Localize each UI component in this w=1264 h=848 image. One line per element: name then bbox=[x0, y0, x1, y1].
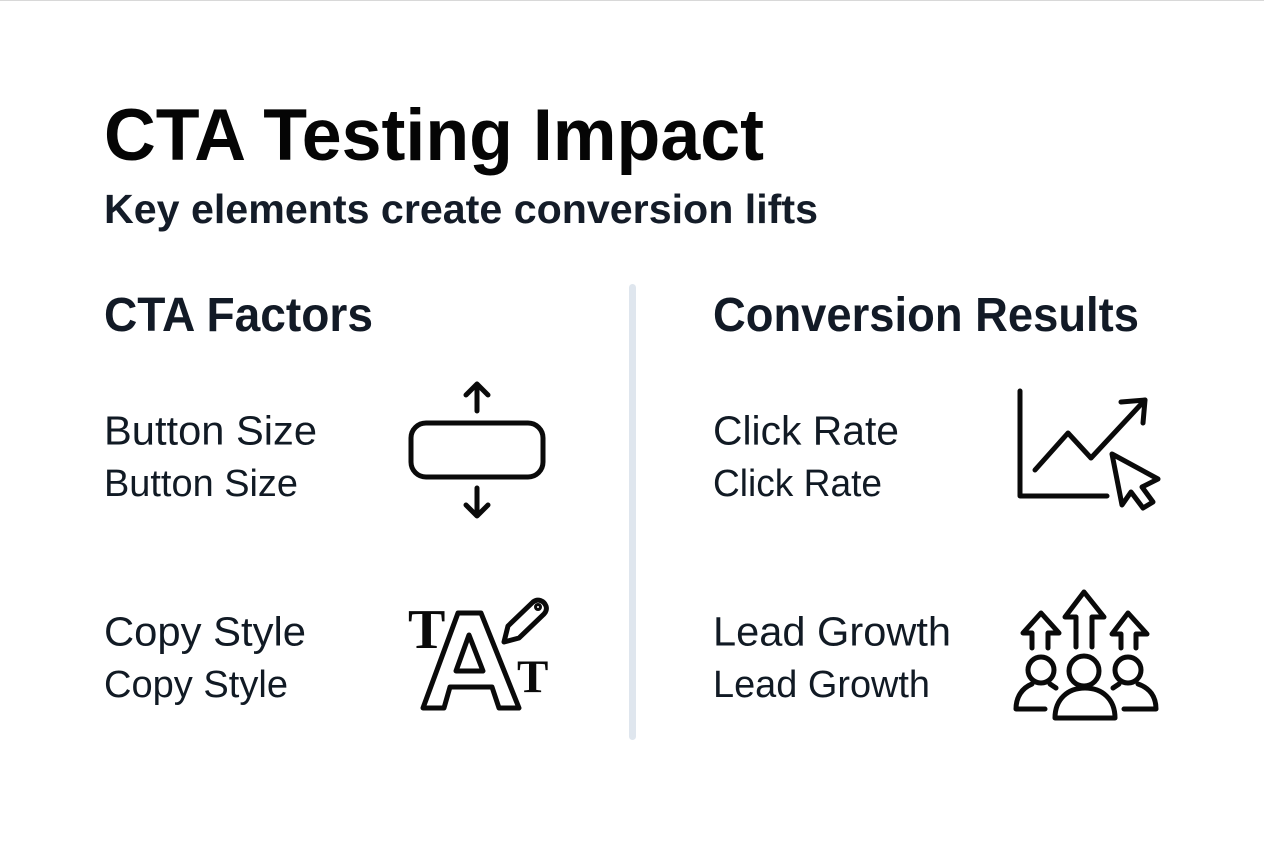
icon: typography with pencil: T bbox=[517, 651, 548, 703]
result: lead growth: Lead Growth bbox=[713, 608, 951, 654]
title: CTA Testing Impact bbox=[104, 95, 764, 176]
result: click rate: Click Rate bbox=[713, 408, 899, 454]
factor: copy style bbox=[104, 608, 306, 706]
divider bbox=[629, 284, 636, 740]
factor: copy style: Copy Style bbox=[104, 664, 288, 706]
panel: conversion results bbox=[713, 289, 1158, 718]
result: lead growth bbox=[713, 608, 951, 706]
subtitle: Key elements create conversion lifts bbox=[104, 186, 818, 232]
panel: CTA factors bbox=[104, 289, 548, 708]
icon: button with resize arrows bbox=[411, 384, 543, 516]
icon: typography with pencil bbox=[408, 599, 548, 708]
result: click rate: Click Rate bbox=[713, 463, 882, 505]
factor: button size: Button Size bbox=[104, 463, 298, 505]
icon: typography with pencil: T bbox=[408, 599, 445, 661]
result: click rate bbox=[713, 408, 899, 505]
result: lead growth: Lead Growth bbox=[713, 664, 930, 706]
heading: CTA Factors: CTA Factors bbox=[104, 289, 373, 342]
heading: Conversion Results: Conversion Results bbox=[713, 289, 1139, 342]
icon: rising chart with cursor bbox=[1020, 391, 1158, 508]
factor: button size: Button Size bbox=[104, 408, 317, 454]
icon: people with up arrows bbox=[1016, 592, 1156, 718]
factor: copy style: Copy Style bbox=[104, 608, 306, 654]
factor: button size bbox=[104, 408, 317, 505]
